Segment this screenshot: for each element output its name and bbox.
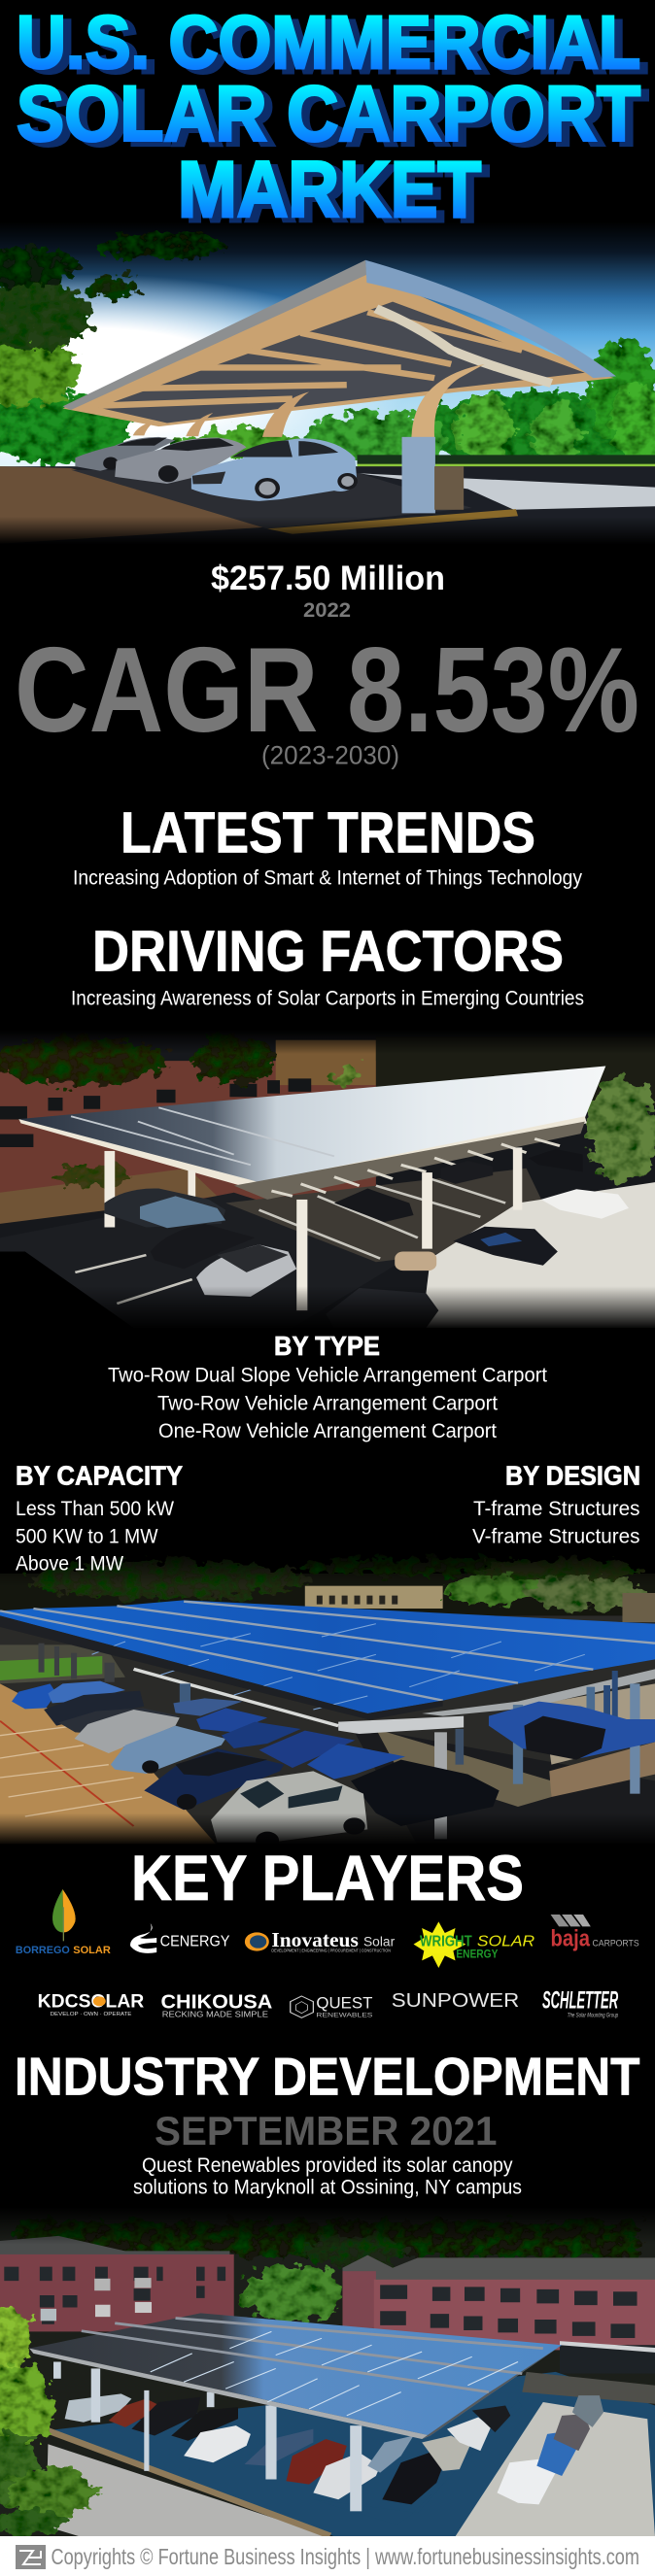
by design heading: BY DESIGN <box>505 1461 640 1490</box>
footer bar <box>0 2536 655 2576</box>
logo: Wright Solar Energy: SOLAR <box>477 1932 534 1949</box>
hero photo: curved solar carport with cars <box>0 221 655 544</box>
logo: Wright Solar Energy: WRIGHT <box>420 1932 472 1949</box>
logo: Quest Renewables <box>291 1995 373 2018</box>
parked cars <box>12 1681 655 1849</box>
tree on left <box>0 2306 96 2536</box>
photo: white flat carport over parking lot <box>0 1030 655 1335</box>
logo: Chikousa: CHIKOUSA <box>160 1990 272 2014</box>
logo: Borrego Solar: BORREGO <box>16 1944 70 1956</box>
by type item 3: One-Row Vehicle Arrangement Carport <box>158 1420 497 1442</box>
logo: KDC Solar <box>38 1990 144 2017</box>
driving factors text: Increasing Awareness of Solar Carports in Emerging Countries <box>71 987 584 1009</box>
development text <box>133 2154 522 2199</box>
by capacity heading: BY CAPACITY <box>16 1461 183 1490</box>
logo: Inovateus Solar: Inovateus <box>271 1929 359 1951</box>
support beams and posts <box>39 1644 655 1839</box>
logo: KDC Solar: DEVELOP · OWN · OPERATE <box>51 2012 132 2017</box>
solar canopy roof <box>29 2313 562 2439</box>
logo: Inovateus Solar: DEVELOPMENT | ENGINEERING | PROCUREMENT | CONSTRUCTION <box>271 1949 391 1953</box>
carport roof <box>0 1600 655 1726</box>
development text: Quest Renewables provided its solar canopy <box>142 2154 513 2177</box>
base year: 2022 <box>303 599 351 622</box>
latest trends heading: LATEST TRENDS <box>121 800 535 864</box>
logo: Inovateus Solar <box>245 1929 396 1953</box>
logo: Cenergy <box>130 1923 229 1953</box>
forecast period: (2023-2030) <box>261 741 399 770</box>
logo: Baja Carports: baja <box>551 1925 590 1951</box>
logo: Chikousa: RECKING MADE SIMPLE <box>162 2011 268 2018</box>
logo: Borrego Solar: SOLAR <box>73 1944 111 1956</box>
title <box>17 1 648 239</box>
parking lot cars <box>65 2393 603 2504</box>
logo: Schletter <box>542 1987 618 2018</box>
key player logos <box>16 1889 639 2018</box>
title line 3: MARKET <box>186 150 489 239</box>
parked cars <box>104 1149 629 1328</box>
capacity item 2: 500 KW to 1 MW <box>16 1526 158 1548</box>
logo: Quest Renewables: QUEST <box>316 1995 373 2013</box>
canopy roof <box>62 260 616 426</box>
logo: Inovateus Solar: Solar <box>363 1934 396 1949</box>
carport roof <box>18 1066 605 1200</box>
brick buildings <box>0 2236 655 2350</box>
logo: KDC Solar: KDCSOLAR <box>38 1990 144 2012</box>
logo: Borrego Solar <box>16 1889 111 1956</box>
ground and road <box>46 2372 655 2536</box>
logo: Wright Solar Energy: ENERGY <box>456 1947 498 1960</box>
by type item 2: Two-Row Vehicle Arrangement Carport <box>157 1393 498 1414</box>
car: front <box>191 438 358 501</box>
latest trends text: Increasing Adoption of Smart & Internet of Things Technology <box>73 867 582 890</box>
development date: SEPTEMBER 2021 <box>155 2108 498 2153</box>
ground <box>0 1683 218 1846</box>
logo: SunPower: SUNPOWER <box>392 1989 519 2012</box>
title line 3: MARKET <box>178 146 481 234</box>
photo: blue solar carport with parked cars <box>0 1544 655 1853</box>
photo: campus solar canopy at Maryknoll <box>0 2207 655 2536</box>
logo: Baja Carports <box>551 1915 639 1951</box>
segment: by capacity <box>16 1461 183 1575</box>
key players heading: KEY PLAYERS <box>131 1843 524 1914</box>
segment: by type <box>108 1331 547 1442</box>
market size value: $257.50 Million <box>211 559 445 597</box>
logo: Wright Solar Energy <box>414 1921 534 1968</box>
capacity item 1: Less Than 500 kW <box>16 1498 174 1520</box>
capacity item 3: Above 1 MW <box>16 1552 123 1575</box>
segment: by design <box>472 1461 640 1548</box>
canopy posts <box>53 2362 362 2511</box>
logo: Chikousa <box>160 1990 272 2018</box>
design item 2: V-frame Structures <box>472 1526 639 1548</box>
driving factors heading: DRIVING FACTORS <box>92 919 564 983</box>
by type heading: BY TYPE <box>274 1331 380 1361</box>
car: rear <box>75 437 176 471</box>
by type item 1: Two-Row Dual Slope Vehicle Arrangement Carport <box>108 1364 547 1387</box>
carport posts <box>104 1147 522 1310</box>
design item 1: T-frame Structures <box>473 1498 639 1520</box>
car: middle <box>115 438 247 484</box>
footer logo <box>16 2545 46 2569</box>
canopy support arches <box>133 364 485 513</box>
development text: solutions to Maryknoll at Ossining, NY campus <box>133 2177 522 2199</box>
logo: Quest Renewables: RENEWABLES <box>316 2012 372 2018</box>
logo: Cenergy: CENERGY <box>160 1932 229 1949</box>
